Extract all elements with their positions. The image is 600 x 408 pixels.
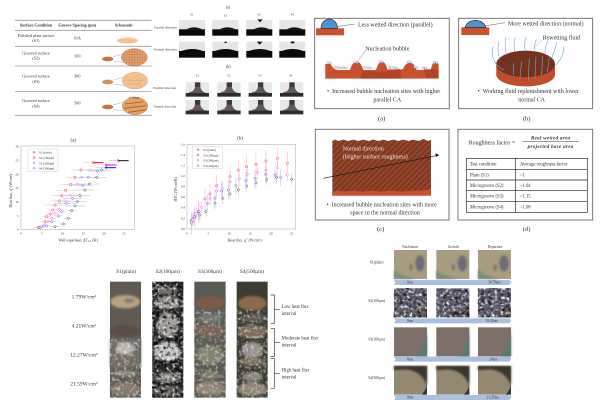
table rows text: (S4) [32,103,40,108]
panel (b): rewetting fluid [459,18,593,123]
interval labels [282,305,319,381]
formula [469,137,579,150]
axis ticks labels: 25 [15,158,19,162]
caption text [478,88,579,103]
direction labels b [153,86,176,108]
droplet row: parallel [179,19,305,36]
table rows text: Polished plain surface [18,33,54,38]
column headers [116,268,264,275]
roughness table: Microgroove (S3) [470,195,504,200]
normal direction label: (Higher surface roughness) [343,153,408,160]
axis ticks labels: 10 [61,231,64,235]
legend: S1 (plain) [39,151,52,155]
series S3 [39,165,107,227]
column headers: S4(500μm) [240,268,264,275]
table rows text: N/A [74,36,81,41]
interval labels: interval [282,343,297,348]
column headers: Nucleation [402,245,418,249]
column S1 photos [110,282,141,398]
droplet on substrate icon [461,20,505,35]
table: surface conditions [15,20,152,115]
interval labels: Moderate heat flux [282,336,319,341]
axis ticks labels: 25 [122,231,126,235]
row S4 photos [394,366,511,395]
column headers: S1(plain) [116,268,136,275]
caption text [327,202,437,216]
column labels a: S3 [257,12,261,16]
column headers: Departure [488,245,503,249]
axis ticks labels: 10 [15,200,19,204]
panel caption: (d) [523,226,531,233]
legend: S3 (300μm) [39,161,54,165]
axis tick labels: 5 [208,231,210,235]
series S1 [40,161,118,227]
contact angle images [153,4,305,114]
column headers [402,245,503,249]
x axis title: Wall superheat, ΔTₛₐₜ (K) [58,239,98,244]
caption text: normal CA [518,97,546,103]
axis tick labels: 20 [269,231,273,235]
axis ticks labels: 20 [15,172,19,176]
caption text: • Increased bubble nucleation sites with higher [327,89,440,95]
axis ticks labels: 5 [17,214,19,218]
timeline labels: 19.22ms [485,319,498,323]
panel (d): roughness factor [458,129,593,233]
schematic: groove S3 [102,72,148,89]
column labels a: S1 [190,12,194,16]
roughness table: Test condition [470,163,497,168]
legend: S3 (300μm) [203,159,218,163]
normal direction label: Normal direction [343,147,384,153]
table rows text: 300 [74,74,80,79]
table rows text: (S3) [32,79,40,84]
caption (a): (a) [226,4,231,9]
table header: Groove Spacing (μm) [58,23,97,28]
row labels [368,260,386,380]
roughness table: Microgroove (S2) [470,184,504,189]
axis tick labels: 25 [290,231,294,235]
chart (a): heat flux vs wall superheat [9,138,134,244]
plot frame [21,146,134,230]
heat flux labels [70,295,98,387]
series S2 [192,158,287,223]
formula: Real wetted area [531,137,571,142]
axis tick labels: 1.4 [181,153,185,157]
series S4 [40,168,106,227]
axis tick labels: 1.0 [181,174,185,178]
frame [315,129,449,220]
roughness table: ~1 [520,173,525,178]
brackets [271,295,280,388]
legend: S2 (100μm) [203,153,218,157]
direction labels a: Normal direction [154,48,177,52]
axis ticks labels: 20 [102,231,106,235]
series S4 [192,174,281,222]
interval labels: Low heat flux [282,305,309,310]
y axis title: Heat flux, q″ (W/cm²) [9,173,14,208]
caption text: • Working fluid replenishment with lower [478,88,579,95]
frame [459,18,593,109]
critical heat flux arrows [93,161,129,168]
timeline labels: 30.78ms [488,281,501,285]
table rows text: 500 [74,100,80,105]
column labels b: S4 [289,73,293,77]
column S3 photos [194,282,226,398]
label: More wetted direction (normal) [508,20,584,27]
row S2 photos [394,288,511,317]
panel caption: (b) [523,116,530,123]
table header [20,23,133,28]
axis tick labels: 0 [186,231,188,235]
heat flux labels: 4.21W/cm² [72,324,97,330]
formula: Roughness factor = [469,139,516,146]
axis ticks labels [15,144,126,235]
interval labels: High heat flux [282,369,310,374]
legend: S1 (plain) [203,148,216,152]
row labels: S1(plain) [370,260,384,264]
table rows text: Grooved surface [22,50,50,55]
table rows text: (S1) [32,38,40,43]
frame [315,18,449,109]
table header: Surface Condition [20,23,53,28]
x axis title: Heat flux, q″ (W/cm²) [228,239,262,244]
legend [28,149,58,172]
timeline labels: 0ms [407,319,414,323]
axis tick labels [181,142,294,235]
axis ticks labels: 15 [15,186,19,190]
frame [458,129,593,220]
roughness table: Microgroove (S4) [470,205,504,210]
normal direction label [343,147,408,160]
heat flux labels: 12.27W/cm² [70,352,98,358]
column S2 photos [152,282,183,398]
row labels: S3(300μm) [368,337,386,341]
axis tick labels: 10 [228,231,231,235]
roughness table: ~1.64 [520,184,531,189]
legend: S4 (500μm) [203,164,218,168]
roughness table [466,158,587,212]
column labels b: S2 [227,73,231,77]
column S4 photos [237,282,268,398]
arrow [323,153,439,178]
caption: (b) [237,136,243,141]
legend: S4 (500μm) [39,167,54,171]
caption: (a) [71,138,76,143]
boiling photo matrix [70,268,319,398]
series S2 [38,163,93,227]
axis ticks labels: 0 [20,231,22,235]
table rows text: (S2) [32,56,40,61]
bubble timeline photos [368,245,511,400]
schematic: groove S4: b=500μm [129,97,140,100]
roughness table: ~1.15 [520,195,531,200]
axis tick labels: 0.0 [181,227,185,231]
legend [192,147,222,168]
table rules [15,20,152,115]
direction labels b: Normal direction [153,104,176,108]
heat flux labels: 1.79W/cm² [72,295,97,301]
column headers: Growth [448,245,459,249]
caption text: parallel CA [373,97,402,103]
plot frame [187,144,296,229]
direction labels a: Parallel direction [154,25,177,29]
axis ticks labels: 30 [15,144,19,148]
axis tick labels: 0.2 [181,216,185,220]
rewetting fluid label: Rewetting fluid [543,35,580,42]
row S1 photos [394,250,511,279]
axis ticks labels: 15 [82,231,85,235]
series S3 [193,168,287,220]
axis ticks labels: 5 [41,231,43,235]
y axis title: HTC (W/cm²K) [174,176,178,202]
panel caption: (a) [378,116,385,123]
panel (c): normal direction roughness [315,129,449,233]
timeline arrows [394,280,511,400]
table rows text: Grooved surface [22,74,50,79]
axis tick labels: 0.8 [181,185,185,189]
axis tick labels: 0.6 [181,195,185,199]
column labels b: S3 [258,73,262,77]
axis tick labels: 0.4 [181,206,185,210]
column labels a [190,12,294,18]
timeline labels: 24ms [489,357,498,361]
column labels b [196,73,293,77]
caption text: space in the normal direction [350,210,420,216]
formula: projected base area [527,145,574,150]
label: Less wetted direction (parallel) [358,22,433,29]
axis tick labels: 1.2 [181,163,185,167]
column labels b: S1 [196,73,199,77]
schematic: groove S2 [102,49,147,66]
series S1 [192,177,292,220]
direction labels a [154,25,177,52]
caption text [327,89,440,103]
row labels: S2(100μm) [368,299,386,303]
axis tick labels: 15 [248,231,252,235]
chart (b): HTC vs heat flux [174,136,296,244]
grooved surface with bubbles [325,60,439,79]
roughness table: Plain (S1) [470,173,489,178]
panel (a): nucleation bubbles [315,18,449,123]
timeline labels: 0ms [407,357,414,361]
panel caption: (c) [377,226,384,233]
column headers: S3(300μm) [198,268,222,275]
column headers: S2(100μm) [156,268,180,275]
table rows text: Grooved surface [22,98,50,103]
timeline labels [407,281,501,400]
axis ticks labels: 0 [17,228,19,232]
interval labels: interval [282,376,297,381]
roughness table: Average roughness factor [520,163,568,168]
caption (b): (b) [226,64,231,69]
direction labels b: Parallel direction [153,86,176,90]
table rows text: 100 [74,53,80,58]
axis tick labels: 1.6 [181,142,185,146]
column labels a: S4 [291,12,294,16]
timeline labels: 21.25ms [486,396,499,400]
pendant row: parallel [186,82,303,97]
row labels: S4(500μm) [368,376,386,380]
table rows text [18,33,81,108]
grooved surface [332,139,431,196]
nucleation label: Nucleation bubble [365,46,410,52]
pendant row: normal [186,100,303,114]
schematic: plain disc S1 [117,38,138,44]
row S3 photos [394,327,511,356]
heat flux labels: 21.59W/cm² [70,381,98,387]
table header: Schematic [115,23,133,28]
droplet on substrate icon [316,19,355,35]
timeline labels: 0ms [407,396,414,400]
column labels a: S2 [224,14,227,18]
fluid streams [492,37,564,80]
interval labels: interval [282,312,297,317]
roughness table: ~1.08 [520,205,531,210]
droplet row: normal [179,41,305,58]
caption text: • Increased bubble nucleation sites with more [327,202,437,208]
legend: S2 (100μm) [39,156,54,160]
timeline labels: 0ms [407,281,414,285]
cylinder [496,51,555,86]
